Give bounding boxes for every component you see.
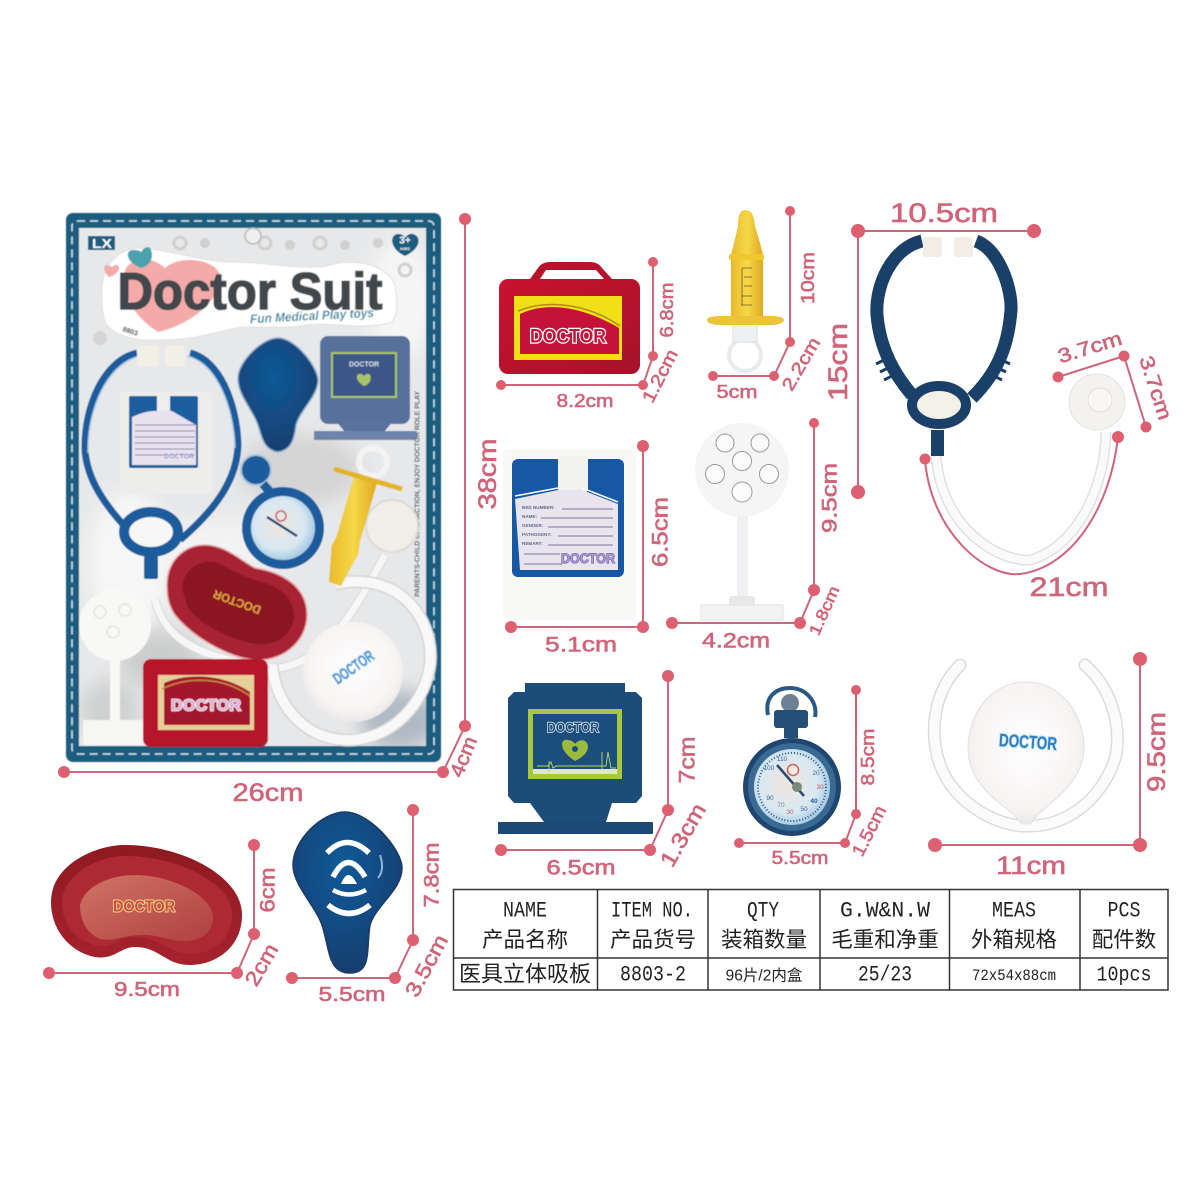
item: stopwatch bbox=[743, 688, 841, 836]
card: doctor case bbox=[143, 659, 268, 747]
dimension: stethoscope: 3.7cm bbox=[1055, 328, 1125, 368]
dimension: head mirror: 1.8cm bbox=[807, 584, 843, 638]
dimension: syringe: 5cm bbox=[716, 382, 758, 402]
card: lollipop mirror bbox=[79, 589, 151, 745]
item: kidney dish bbox=[51, 845, 242, 965]
dimension: monitor: 1.3cm bbox=[655, 799, 711, 871]
item: stethoscope bbox=[876, 237, 1125, 560]
hanger hole bbox=[245, 228, 261, 244]
item: patient chart: NAME: bbox=[522, 514, 538, 519]
item: patient chart: PATHOGENY: bbox=[522, 532, 552, 537]
header row Chinese: 毛重和净重 bbox=[831, 928, 939, 952]
age badge bbox=[392, 234, 419, 256]
table grid bbox=[453, 889, 1168, 990]
header row Chinese: 外箱规格 bbox=[971, 928, 1057, 952]
data row: 72x54x88cm bbox=[972, 967, 1056, 985]
item: otoscope cover bbox=[293, 812, 402, 973]
small pink heart bbox=[104, 265, 119, 277]
dimension: card: 26cm bbox=[232, 779, 304, 807]
dimension: head mirror: 4.2cm bbox=[702, 630, 770, 652]
dimension: stethoscope: 15cm bbox=[823, 323, 853, 401]
age badge: AGES bbox=[400, 247, 411, 251]
dimension: doctor case: 8.2cm bbox=[556, 391, 614, 411]
dimension: patient chart bbox=[505, 440, 672, 656]
item: syringe bbox=[707, 210, 784, 371]
card: chest piece bbox=[366, 500, 418, 552]
dimension: head mirror: 9.5cm bbox=[818, 463, 842, 533]
card frame bbox=[66, 213, 441, 762]
dimension: patient chart: 6.5cm bbox=[648, 497, 672, 567]
item: stopwatch: 30 bbox=[816, 784, 824, 791]
header row Chinese: 装箱数量 bbox=[721, 928, 807, 952]
card: stethoscope head disc bbox=[303, 622, 403, 722]
item: kidney dish: DOCTOR bbox=[113, 898, 175, 916]
header row English bbox=[503, 898, 1140, 924]
dimension: card: 4cm bbox=[446, 733, 482, 781]
stitched border bbox=[72, 221, 434, 754]
title bubble bbox=[102, 247, 397, 340]
spec table bbox=[453, 889, 1168, 990]
header row English: MEAS bbox=[992, 898, 1036, 924]
item: patient chart: GENDER: bbox=[522, 523, 544, 528]
header row Chinese: 产品货号 bbox=[610, 928, 696, 952]
data row: 96片/2内盒 bbox=[726, 966, 803, 984]
data row: 10pcs bbox=[1096, 964, 1152, 988]
header row Chinese bbox=[482, 928, 1156, 952]
dimension: patient chart: 5.1cm bbox=[545, 634, 617, 656]
data row: 医具立体吸板 bbox=[459, 962, 591, 986]
dimension: stethoscope head: 9.5cm bbox=[1143, 712, 1171, 792]
dimension: kidney dish bbox=[43, 839, 283, 1001]
dimension: stethoscope head: 11cm bbox=[996, 852, 1066, 880]
dimension: syringe: 10cm bbox=[798, 252, 818, 304]
dimension: stethoscope: 10.5cm bbox=[890, 198, 998, 228]
header row Chinese: 配件数 bbox=[1092, 928, 1156, 952]
heading: Doctor Suit bbox=[118, 263, 382, 321]
item: monitor: DOCTOR bbox=[547, 719, 599, 735]
brand logo bbox=[88, 236, 115, 251]
card: patient chart bbox=[120, 392, 212, 494]
card: otoscope cover bbox=[238, 338, 318, 452]
item: stopwatch: 100 bbox=[764, 765, 775, 772]
dimension: stopwatch bbox=[734, 685, 890, 868]
dimension: otoscope cover bbox=[286, 804, 453, 1006]
teal heart bbox=[128, 247, 152, 268]
dimension: doctor case bbox=[496, 257, 682, 411]
brand logo: LX bbox=[92, 236, 112, 251]
card: stethoscope bbox=[85, 346, 238, 579]
card inner background bbox=[79, 228, 440, 750]
dimension: kidney dish: 9.5cm bbox=[114, 979, 180, 1001]
header row English: PCS bbox=[1108, 898, 1140, 924]
dimension: monitor: 7cm bbox=[674, 736, 700, 784]
item: patient chart bbox=[503, 449, 636, 620]
dimension: card: 38cm bbox=[474, 438, 502, 510]
card: stethoscope head tube bbox=[155, 555, 430, 740]
dimension: monitor bbox=[495, 670, 711, 880]
dimension: kidney dish: 2cm bbox=[241, 940, 283, 990]
card: syringe bbox=[329, 448, 402, 586]
data row: 25/23 bbox=[858, 962, 912, 988]
item: stopwatch: 110 bbox=[777, 756, 788, 763]
item: stopwatch: 50 bbox=[800, 806, 808, 813]
item: patient chart: REMARY: bbox=[522, 541, 543, 546]
dimension: monitor: 6.5cm bbox=[546, 856, 616, 880]
dimension: kidney dish: 6cm bbox=[256, 868, 280, 912]
cloud shape bbox=[102, 248, 397, 340]
dimension: stopwatch: 5.5cm bbox=[772, 848, 828, 868]
item: patient chart: DOCTOR bbox=[561, 550, 615, 566]
dimension: stopwatch: 8.5cm bbox=[858, 728, 878, 786]
panel: blister card bbox=[66, 213, 441, 762]
card: patient chart: DOCTOR bbox=[164, 454, 194, 460]
model number: 8803 bbox=[122, 326, 139, 338]
item: patient chart: BED NUMBER: bbox=[522, 505, 555, 510]
dimension: otoscope cover: 7.8cm bbox=[420, 842, 444, 908]
item: stopwatch: 20 bbox=[812, 770, 820, 777]
item: stethoscope head bbox=[934, 665, 1117, 826]
dimension: card bbox=[58, 213, 502, 807]
dimension: head mirror bbox=[666, 418, 843, 652]
dimension: stethoscope bbox=[823, 198, 1176, 602]
dimension: doctor case: 6.8cm bbox=[657, 282, 677, 338]
dimension: stethoscope head bbox=[928, 652, 1171, 880]
card: kidney dish bbox=[167, 545, 307, 660]
dimension: stethoscope: 3.7cm bbox=[1134, 353, 1176, 423]
item: stopwatch: 70 bbox=[777, 802, 785, 809]
header row English: ITEM NO. bbox=[611, 898, 693, 924]
dimension: stopwatch: 1.5cm bbox=[848, 802, 890, 860]
card: stethoscope head disc: DOCTOR bbox=[330, 648, 378, 688]
subtitle: Fun Medical Play toys bbox=[250, 306, 374, 326]
item: doctor case: DOCTOR bbox=[530, 326, 606, 348]
dimension: stethoscope: 21cm bbox=[1030, 572, 1108, 602]
dimension: otoscope cover: 5.5cm bbox=[318, 984, 386, 1006]
pink heart bbox=[124, 259, 220, 332]
item: stopwatch: 90 bbox=[766, 795, 774, 802]
card: monitor: DOCTOR bbox=[349, 362, 379, 368]
item: stopwatch: 40 bbox=[810, 798, 818, 805]
data row: 8803-2 bbox=[620, 962, 686, 988]
header row English: G.W&N.W bbox=[840, 898, 931, 924]
header row English: QTY bbox=[747, 898, 779, 924]
card: doctor case: DOCTOR bbox=[171, 698, 241, 714]
item: head mirror bbox=[695, 423, 789, 620]
age badge: 3+ bbox=[399, 236, 411, 246]
card: kidney dish: DOCTOR bbox=[211, 587, 263, 617]
header row English: NAME bbox=[503, 898, 547, 924]
data row bbox=[459, 962, 1152, 988]
item: stopwatch: 30 bbox=[786, 809, 794, 816]
dimension: doctor case: 1.2cm bbox=[638, 346, 682, 406]
item: monitor bbox=[498, 683, 653, 834]
dimension: syringe: 2.2cm bbox=[778, 334, 824, 394]
item: stethoscope head: DOCTOR bbox=[998, 730, 1058, 754]
card: monitor bbox=[314, 336, 417, 440]
dimension: syringe bbox=[708, 206, 824, 402]
card: stopwatch bbox=[241, 455, 324, 569]
header row Chinese: 产品名称 bbox=[482, 928, 568, 952]
item: doctor case bbox=[499, 262, 640, 374]
dimension: otoscope cover: 3.5cm bbox=[401, 931, 453, 1001]
side text: PARENTS-CHILD INTERACTION, ENJOY DOCTOR ROLE PLAY bbox=[412, 391, 422, 597]
